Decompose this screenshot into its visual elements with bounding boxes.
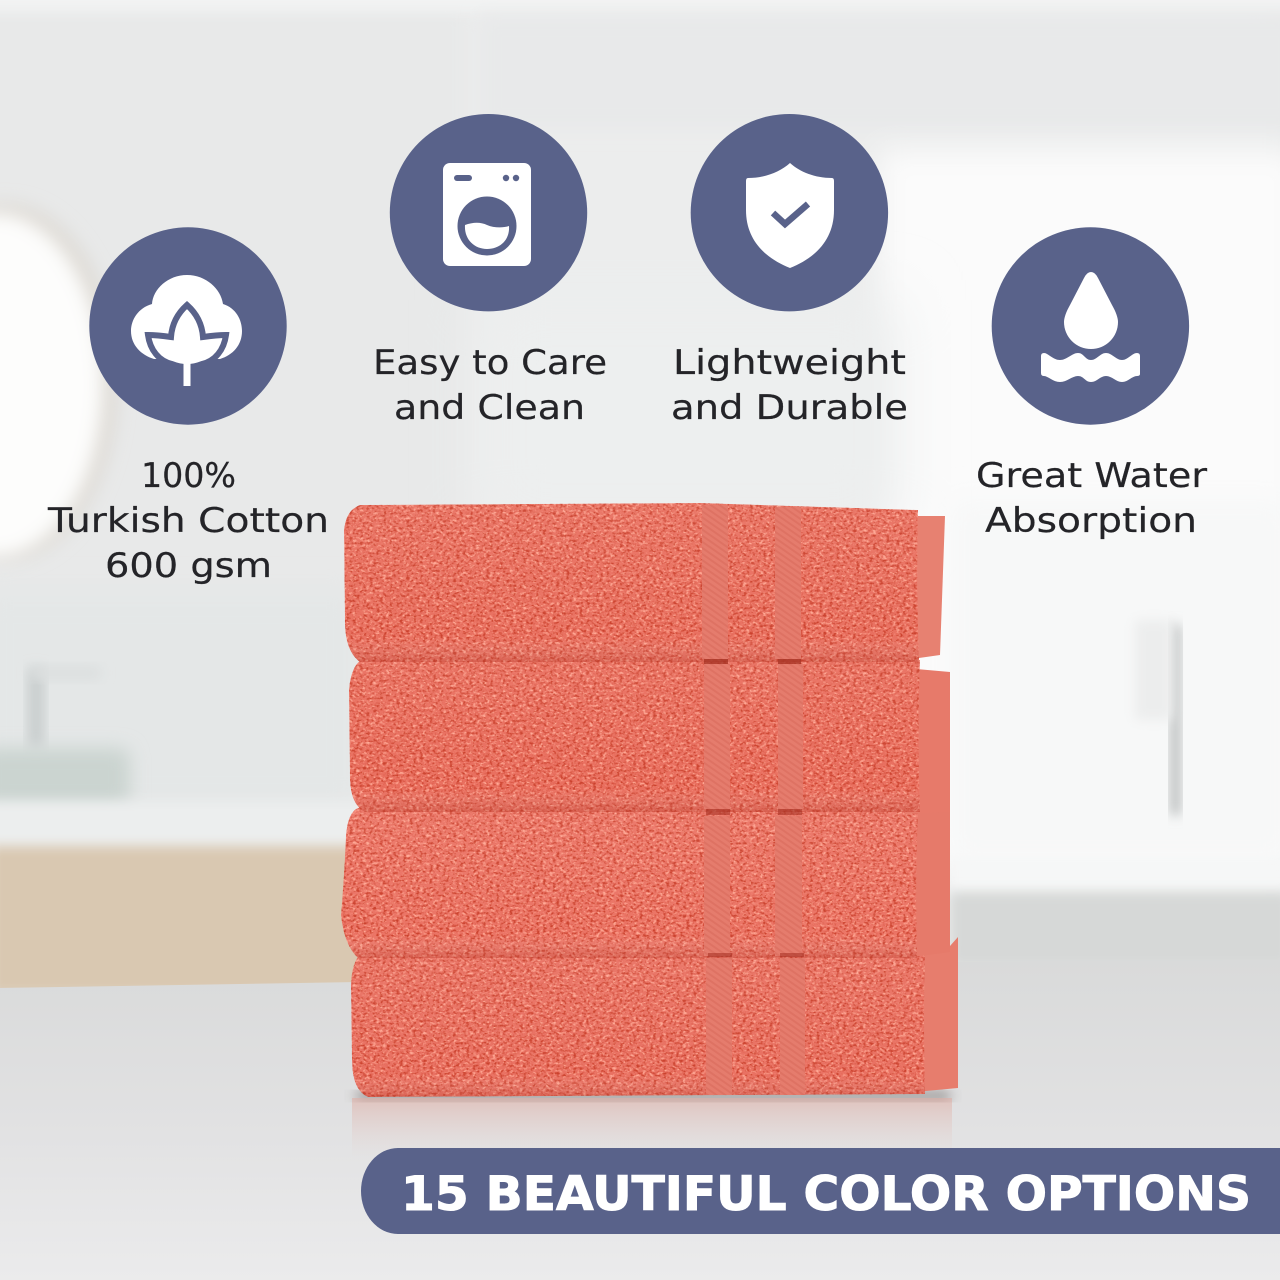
towel 4 terry (351, 950, 925, 1097)
dark folds between towels (704, 659, 804, 957)
label: Lightweight and Durable: Lightweight (673, 343, 906, 383)
label: Great Water Absorption: Absorption (985, 501, 1197, 541)
towel 2 shading (349, 658, 920, 812)
towel 2 dobby bands (704, 664, 803, 809)
towel 2 terry (349, 658, 920, 812)
feature: 100% Turkish cotton (47, 227, 329, 586)
icon: washing machine (390, 114, 587, 311)
towel 1 dobby bands (702, 505, 801, 659)
towel 4 dobby bands (706, 956, 805, 1095)
towel shadow and reflection on table (352, 1092, 952, 1160)
label: Easy to Care and Clean: and Clean (394, 388, 585, 428)
towel 2 hem (905, 668, 950, 814)
label: Great Water Absorption (976, 456, 1207, 541)
icon: cotton (89, 227, 287, 425)
table surface (0, 960, 1280, 1280)
label: Lightweight and Durable: and Durable (671, 388, 908, 428)
towel 3 terry (341, 808, 918, 958)
feature: lightweight and durable (671, 114, 908, 428)
label: Lightweight and Durable (671, 343, 908, 428)
towel 3 shading (341, 808, 918, 958)
feature: great water absorption (976, 227, 1207, 541)
label: 100% Turkish Cotton 600 gsm: 100% (141, 456, 236, 496)
label: Easy to Care and Clean: Easy to Care (373, 343, 607, 383)
label: 100% Turkish Cotton 600 gsm: Turkish Cotton (47, 501, 329, 541)
label: Great Water Absorption: Great Water (976, 456, 1207, 496)
label: 100% Turkish Cotton 600 gsm (47, 456, 329, 586)
feature: easy to care (373, 114, 607, 428)
banner: color options: 15 BEAUTIFUL COLOR OPTIONS (401, 1167, 1251, 1222)
towel 4 shading (351, 950, 925, 1097)
towel stack (341, 503, 958, 1097)
towel 4 hem (915, 937, 958, 1092)
towel 1 hem (905, 516, 945, 660)
label: Easy to Care and Clean (373, 343, 607, 428)
banner: color options (361, 1148, 1280, 1234)
icon: water drop and waves (992, 227, 1189, 425)
icon: shield with check (691, 114, 888, 311)
label: 100% Turkish Cotton 600 gsm: 600 gsm (105, 546, 272, 586)
towel 1 terry (344, 503, 919, 662)
towel 3 dobby bands (704, 816, 802, 956)
towel 1 shading (344, 503, 919, 662)
towel 3 hem (905, 812, 950, 958)
